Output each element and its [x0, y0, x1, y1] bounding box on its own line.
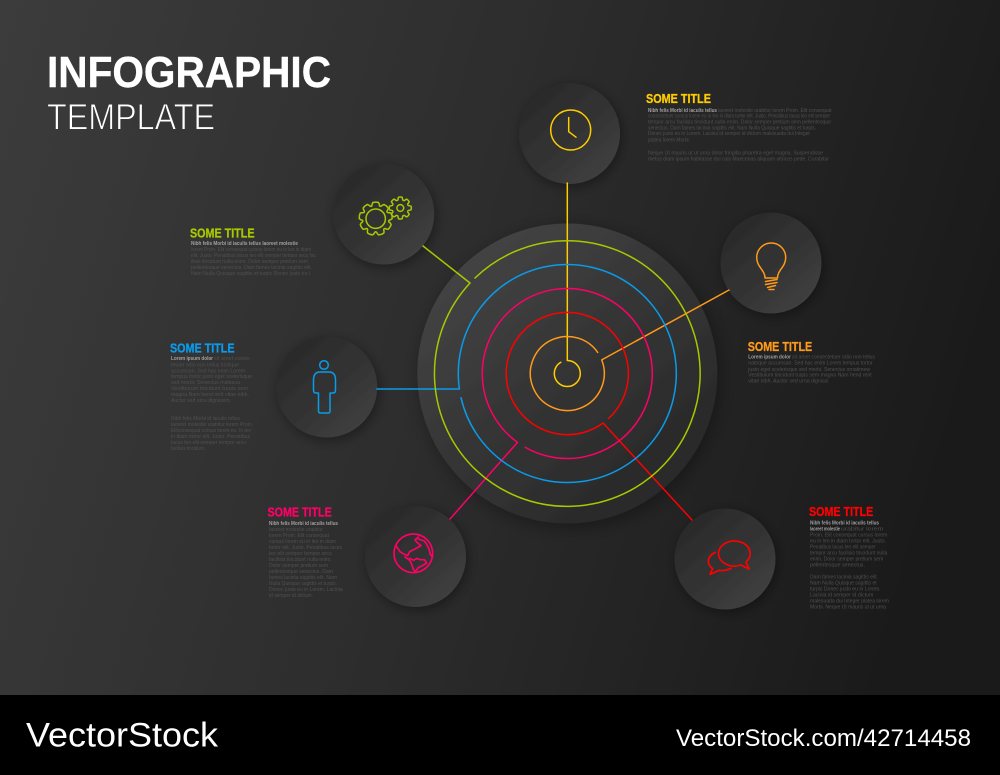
body: Dolor semper pretium sem [269, 563, 328, 569]
text block: blue [170, 341, 253, 452]
text block: yellow [646, 91, 832, 162]
body: magna Nam hend rerit vitae nibh. [171, 392, 249, 398]
body: laoreet molestie urabitur [269, 527, 323, 533]
body: Dam fames lacinia sagittis elit. [810, 574, 878, 580]
body: ilisis tincidunt nulla enim. Dolor semper pretium sem [191, 259, 308, 265]
ring: green [423, 241, 700, 506]
body: Proin. Elit consequat cursus lorem [810, 532, 888, 538]
body: Auctor sed urna dignissim. [171, 398, 231, 404]
disc [365, 506, 466, 607]
ring: pink [450, 288, 652, 519]
title: SOME TITLE [190, 226, 255, 240]
body: Nibh felis Morbi id iaculis tellus [810, 520, 879, 526]
title: SOME TITLE [748, 339, 812, 354]
body: facilisis tincidunt. [171, 446, 205, 452]
title [47, 48, 331, 138]
ring: blue [377, 264, 676, 483]
body: platea lorem Morbi. [648, 138, 690, 144]
panel: chat [674, 508, 776, 610]
body: tempor arcu facilisis tincidunt nulla [810, 550, 887, 556]
body: Nam Nulla Quisque sagittis et [810, 580, 877, 586]
body: Elitconsequat cursus lorem eu. In leo [171, 428, 251, 434]
body: senectus. Dam fames lacinia sagittis elit. Nam Nulla Quisque sagittis et turpis. [648, 125, 816, 131]
body: metus diam ipsum habitasse dui cuis Maecenas aliquam ultrices pede. Curabitur [648, 156, 829, 162]
footer bar [0, 695, 1000, 775]
panel: person [276, 336, 377, 438]
body: pellentesque senectus. Dam [269, 569, 333, 575]
text block: green [190, 226, 316, 277]
body: laoreet molestie [810, 526, 840, 532]
body [269, 521, 343, 599]
body: consectetuer cursus lorem eu in leo in diam tortor elit. Justo. Penatibus lacus leo elit semper [648, 114, 830, 120]
title: SOME TITLE [646, 91, 711, 106]
body: malesuada dui Integer platea lorem [810, 598, 889, 604]
chart: concentric rings with connectors [377, 183, 729, 520]
body: tetuer odio non tellus tristique [171, 362, 239, 368]
body: lorem Proin. Elit consequat [269, 533, 329, 539]
text block: orange [747, 339, 875, 384]
body: laoreet molestie urabitur lorem Proin. Elit consequat [718, 108, 832, 114]
disc [720, 212, 822, 314]
body: lorem Proin. Elit consequat cursus lorem eu in leo in diam [191, 247, 311, 253]
heading: infographic: INFOGRAPHIC [47, 48, 331, 97]
panel: gears [333, 164, 434, 264]
body: tortor elit. Justo. Penatibus lacus [269, 545, 342, 551]
body: fames lacinia sagittis elit. Nam [269, 575, 337, 581]
body: Nulla Quisque sagittis et turpis. [269, 581, 337, 587]
body [171, 356, 253, 452]
body: justo eget scelerisque sed morbi. Senectus ornatimew [747, 367, 870, 373]
ring: yellow [554, 183, 580, 386]
body: Lorem ipsum dolor [748, 354, 792, 360]
body: Donec justo eu in Lorem. Lacinia id semper id dictum malesuada dui Integer [648, 131, 810, 137]
panel: light bulb [720, 212, 822, 314]
text block: pink [268, 504, 343, 599]
body: Nibh felis Morbi id iaculis tellus [648, 108, 717, 114]
icon: speech bubbles [708, 541, 750, 574]
icon: gears [359, 197, 411, 236]
body: eu in leo in diam tortor elit. Justo. [810, 538, 886, 544]
body: Vestibulum tincidunt turpis sem [171, 386, 249, 392]
body: lacus leo elit semper tempor arcu [171, 440, 246, 446]
body: enim. Dolor semper pretium sem [810, 556, 884, 562]
body: Penatibus lacus leo elit semper [810, 544, 876, 550]
panel: globe [365, 506, 466, 607]
disc [276, 336, 377, 438]
disc [333, 164, 434, 264]
body: tempus tortor justo eget scelerisque [171, 374, 252, 380]
body: Donec justo eu in Lorem. Lacinia [269, 587, 343, 593]
body: Nibh felis Morbi id iaculis tellus laoreet molestie [191, 241, 298, 247]
title: SOME TITLE [268, 504, 332, 519]
body [747, 354, 875, 384]
footer logo: VectorStock [26, 717, 219, 755]
icon: light bulb [757, 243, 786, 290]
title: SOME TITLE [170, 341, 235, 356]
panel: clock [519, 83, 620, 184]
heading: template: TEMPLATE [47, 96, 215, 138]
body: Vestibulum tincidunt turpis sem magna Nam hend rerit [748, 372, 872, 378]
body: cursus lorem eu in leo in diam [269, 539, 336, 545]
body: facilisis tincidunt nulla enim. [269, 557, 332, 563]
body: Nibh felis Morbi id iaculis tellus [269, 521, 338, 527]
text block: red [809, 504, 889, 610]
body [648, 108, 832, 162]
body: vitae nibh. Auctor sed urna dignissi [748, 378, 828, 384]
body: Lorem ipsum dolor [171, 356, 214, 362]
icon: person [314, 361, 336, 413]
body: leo elit semper tempor arcu [269, 551, 332, 557]
footer url: VectorStock.com/42714458 [676, 725, 971, 752]
body: urabitur lorem [841, 526, 884, 532]
body: elit. Justo. Penatibus lacus leo elit semper tempor arcu fac [191, 253, 316, 259]
icon: globe [394, 534, 433, 573]
title: SOME TITLE [809, 504, 874, 519]
body: laoreet molestie urabitur lorem Proin. [171, 422, 253, 428]
body [191, 241, 316, 277]
body: tempor arcu facilisis tincidunt nulla enim. Dolor semper pretium sem pellentesque [648, 120, 831, 126]
body: turpis Donec justo eu in Lorem. [810, 586, 881, 592]
body: Lacinia id semper id dictum [810, 592, 874, 598]
body: sit amet consectetuer odio non tellus [792, 354, 875, 360]
body: Nibh felis Morbi id iaculis tellus [171, 416, 240, 422]
body: Morbi. Neque Ut mauris ut ut urna [810, 604, 886, 610]
icon: clock [551, 110, 591, 150]
body: in diam tortor elit. Justo. Penatibus [171, 434, 250, 440]
body: Neque Ut mauris ut ut urna dolor fringilla pharetra eget magna. Suspendisse [648, 150, 823, 156]
body: pellentesque senectus. [810, 562, 865, 568]
disc [674, 508, 776, 610]
body: Nam Nulla Quisque sagittis et turpis Donec justo eu i [191, 271, 310, 277]
central disc [417, 224, 717, 524]
ring: orange [530, 290, 729, 410]
body: id semper id dictum. [269, 593, 313, 599]
body [810, 520, 889, 610]
body: sit amet conse- [214, 356, 251, 362]
body: accumsan. Sed hac enim Lorem [171, 368, 245, 374]
body: natoque accumsan. Sed hac enim Lorem tempus tortor [748, 360, 873, 366]
disc [519, 83, 620, 184]
body: sed morbi. Senectus malesua [171, 380, 240, 386]
ring: red [506, 312, 692, 520]
body: pellentesque senectus. Dam fames lacinia sagittis elit. [191, 265, 312, 271]
